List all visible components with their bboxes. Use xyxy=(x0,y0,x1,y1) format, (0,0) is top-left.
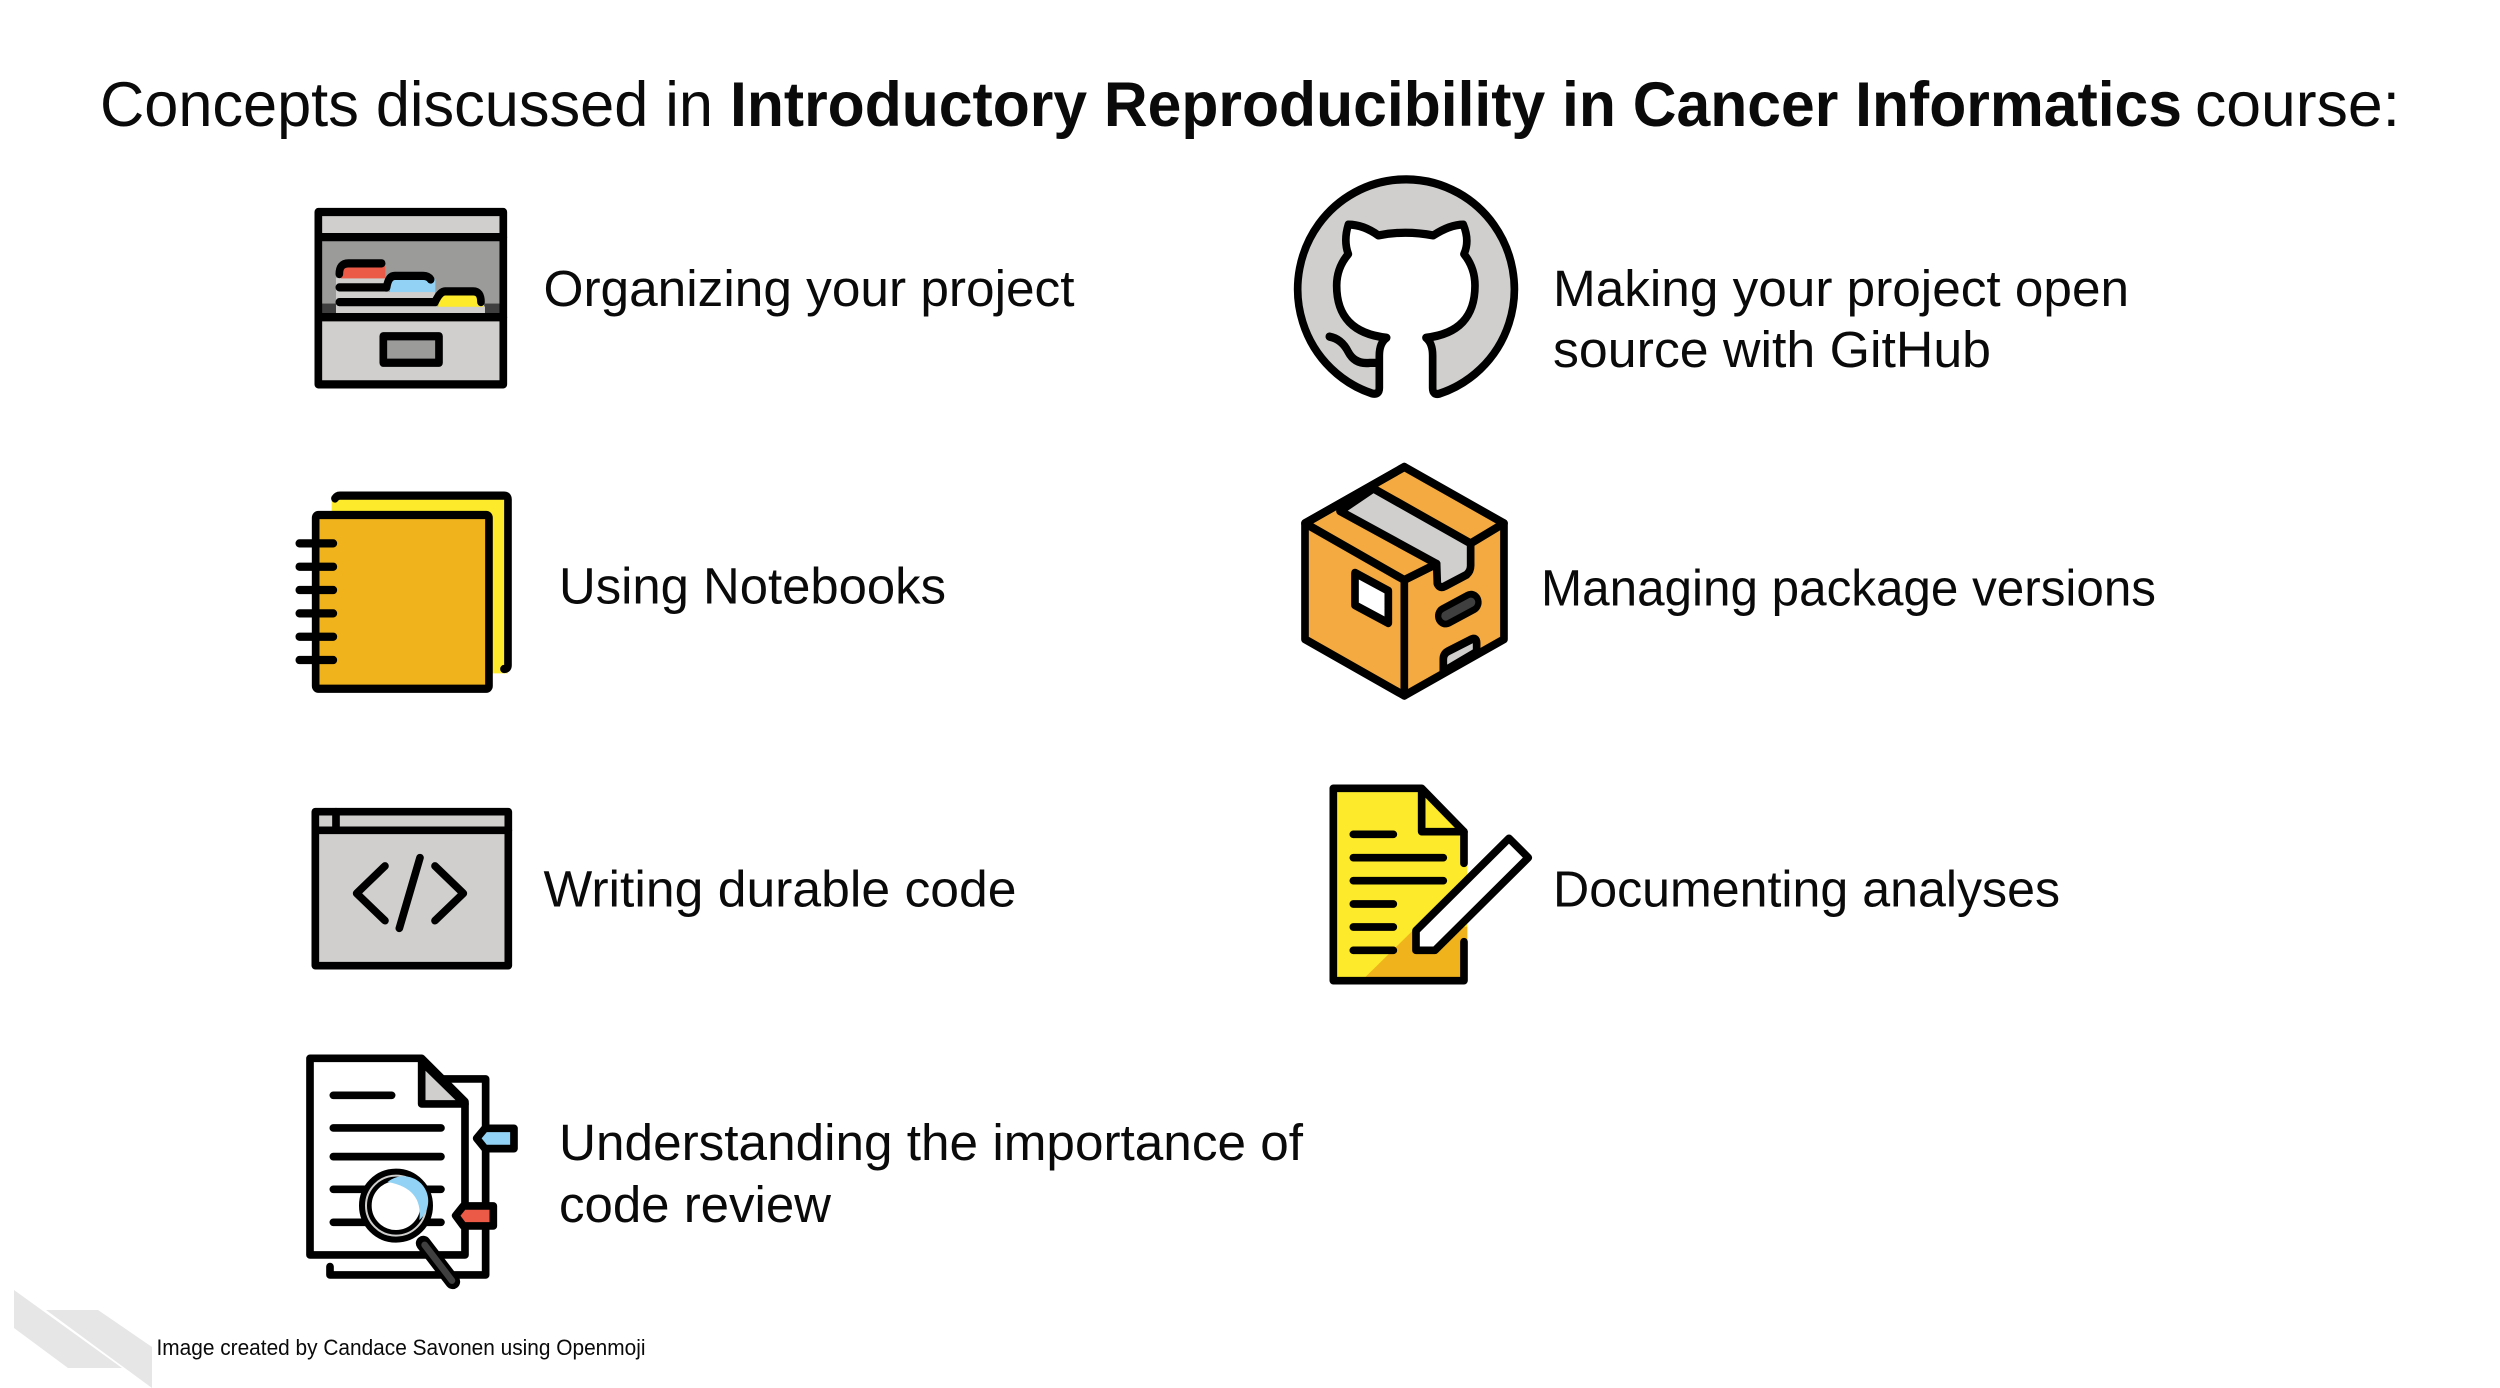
title xyxy=(100,70,2400,140)
text: making your project open source xyxy=(1553,260,2129,378)
logo watermark xyxy=(14,1290,152,1388)
text: managing package versions: Managing package versions xyxy=(1541,560,2156,616)
title: Introductory Reproducibility in Cancer Informatics xyxy=(730,70,2182,140)
icon: code window xyxy=(315,812,508,966)
title: Concepts discussed in xyxy=(100,70,713,140)
icon: notebook xyxy=(299,496,508,689)
icon: file cabinet xyxy=(318,212,503,384)
text: understanding code review: Understanding the importance of xyxy=(559,1114,1304,1171)
text: making your project open source: source with GitHub xyxy=(1553,321,1991,378)
text: writing durable code: Writing durable code xyxy=(544,860,1016,918)
text: using notebooks: Using Notebooks xyxy=(559,558,946,614)
icon: package box xyxy=(1305,467,1504,696)
icon: document with pencil xyxy=(1333,788,1528,981)
text: making your project open source: Making your project open xyxy=(1553,260,2129,317)
text: organizing your project: Organizing your project xyxy=(544,260,1074,317)
text: understanding code review xyxy=(559,1114,1304,1233)
text: understanding code review: code review xyxy=(559,1176,831,1233)
footnote: image credit: Image created by Candace Savonen using Openmoji xyxy=(156,1335,646,1360)
text: documenting analyses: Documenting analyses xyxy=(1553,860,2060,918)
title: course: xyxy=(2195,70,2400,140)
icon: code review document xyxy=(310,1058,514,1282)
icon: GitHub xyxy=(1298,179,1514,394)
